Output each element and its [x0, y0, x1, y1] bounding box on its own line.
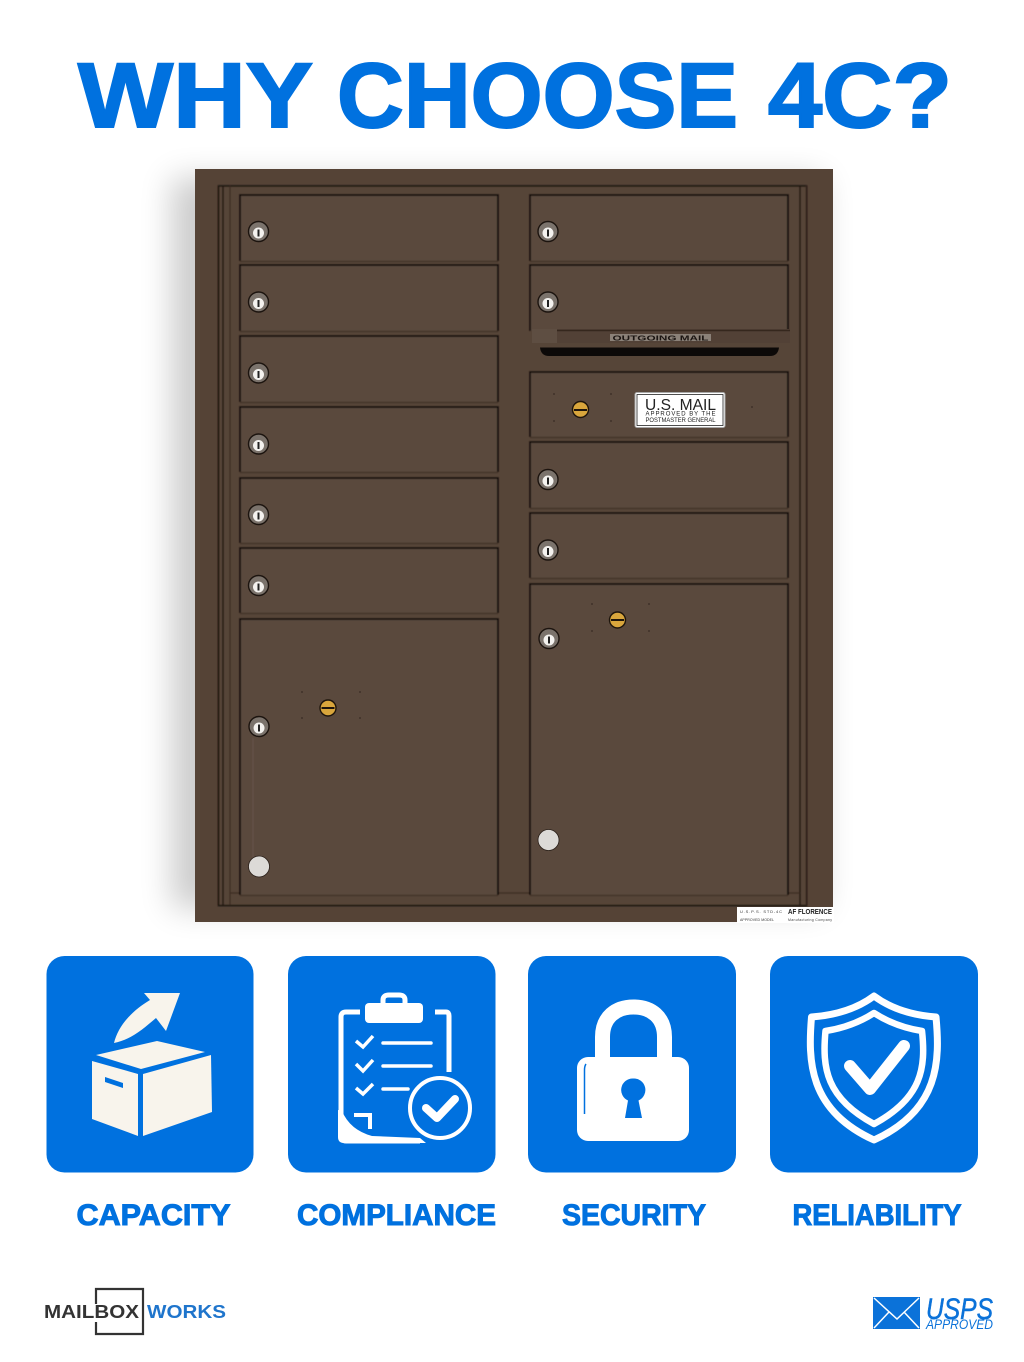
- panel: compliance: [288, 956, 496, 1172]
- logo: Mailbox Works: WORKS: [147, 1302, 226, 1322]
- outgoing mail slot: OUTGOING MAIL: [612, 336, 710, 342]
- label: capacity: CAPACITY: [76, 1199, 230, 1232]
- U.S. Mail plate: [635, 392, 725, 428]
- title: CHOOSE: [337, 45, 738, 147]
- U.S. Mail plate: POSTMASTER GENERAL: [646, 418, 716, 424]
- manufacturer label: U.S.P.S. STD-4C: [740, 909, 782, 914]
- mailbox unit: [172, 169, 834, 923]
- icon: padlock: [577, 1007, 689, 1141]
- icon: clipboard with check badge: [338, 995, 470, 1143]
- icon: shield with check: [810, 996, 937, 1140]
- manufacturer label: AF FLORENCE: [788, 909, 832, 916]
- logo: USPS approved: APPROVED: [925, 1317, 993, 1332]
- title: WHY: [78, 45, 313, 147]
- label: reliability: RELIABILITY: [792, 1199, 962, 1232]
- U.S. Mail plate: APPROVED BY THE: [646, 412, 716, 418]
- parcel door knobs: [248, 830, 559, 877]
- manufacturer label: APPROVED MODEL: [740, 918, 774, 922]
- logo: USPS approved: USPS: [926, 1293, 993, 1326]
- door bottom edges: [240, 262, 788, 896]
- panel: reliability: [770, 956, 978, 1172]
- panel: security: [528, 956, 736, 1172]
- logo: Mailbox Works: [44, 1289, 226, 1334]
- label: security: SECURITY: [562, 1199, 706, 1232]
- right column doors: [530, 195, 788, 895]
- title: 4C?: [768, 45, 952, 147]
- manufacturer label: [737, 907, 834, 923]
- label: compliance: COMPLIANCE: [297, 1199, 496, 1232]
- door locks: [248, 222, 559, 736]
- brass locks: [301, 393, 753, 719]
- logo: Mailbox Works: MAILBOX: [44, 1302, 139, 1322]
- panel: capacity: [46, 956, 254, 1172]
- icon: box with arrow: [92, 993, 212, 1136]
- outgoing mail slot: [532, 329, 790, 356]
- logo: USPS approved: [873, 1293, 993, 1332]
- U.S. Mail plate: U.S. MAIL: [645, 397, 716, 414]
- title: [78, 45, 952, 147]
- manufacturer label: Manufacturing Company: [788, 918, 832, 922]
- left column doors: [240, 195, 498, 895]
